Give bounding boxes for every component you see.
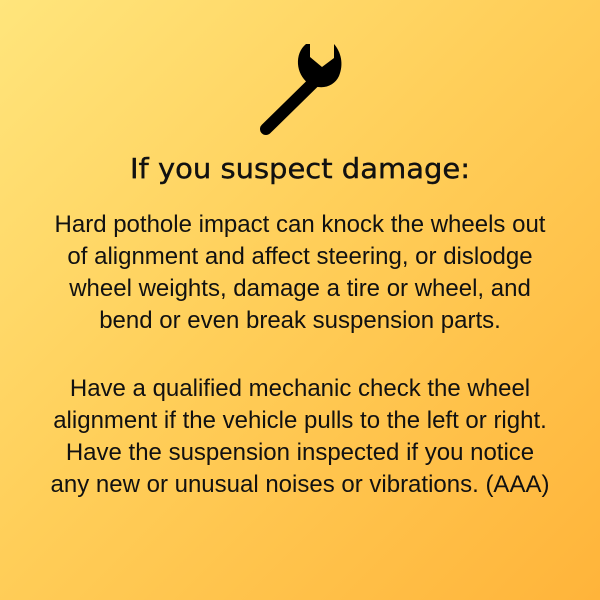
text block: paragraph 2 xyxy=(51,375,549,498)
text block: paragraph 2: Have a qualified mechanic check the wheel xyxy=(70,375,530,402)
icon: wrench xyxy=(260,44,342,135)
text block: paragraph 1: Hard pothole impact can knock the wheels out xyxy=(55,211,545,238)
text block: paragraph 2: alignment if the vehicle pulls to the left or right. xyxy=(53,407,547,434)
text block: paragraph 1: wheel weights, damage a tire or wheel, and xyxy=(69,275,531,302)
title: If you suspect damage: xyxy=(130,152,470,185)
text block: paragraph 1 xyxy=(55,211,546,334)
text block: paragraph 1: bend or even break suspension parts. xyxy=(99,307,501,334)
text block: paragraph 2: Have the suspension inspected if you notice xyxy=(66,439,534,466)
text block: paragraph 2: any new or unusual noises or vibrations. (AAA) xyxy=(51,471,549,498)
text block: paragraph 1: of alignment and affect steering, or dislodge xyxy=(67,243,533,270)
